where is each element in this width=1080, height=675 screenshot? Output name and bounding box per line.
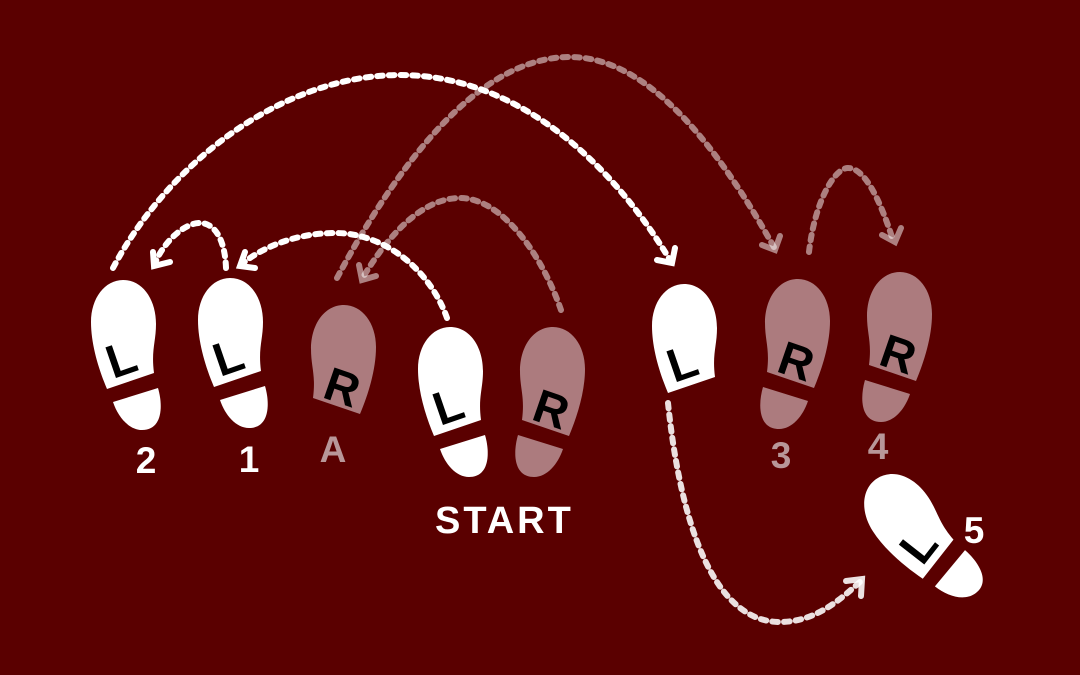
footprint: right foot A without heel: R	[318, 356, 367, 418]
label: START: START	[435, 500, 574, 542]
label: 1: 1	[239, 439, 259, 480]
footprint: left foot 1: L	[206, 327, 250, 386]
arrow: translucent arc from 3 to 4	[809, 168, 901, 252]
arrow: curved path from front left foot to 5	[668, 403, 862, 622]
label: 5: 5	[964, 510, 984, 551]
footprint: start right foot: R	[527, 378, 576, 440]
arrow: start left foot to 1	[240, 233, 447, 318]
label: 2: 2	[136, 440, 156, 481]
footprint: right foot 4	[862, 272, 932, 422]
footprint: front left foot without heel: L	[660, 333, 704, 392]
footprint: left foot 2	[91, 280, 161, 430]
footprint: right foot 3	[760, 279, 830, 429]
label: 3: 3	[771, 435, 791, 476]
footprint: start left foot: L	[426, 376, 470, 435]
footprint: left foot 5 rotated	[850, 458, 990, 622]
footprint: front left foot without heel	[652, 284, 717, 393]
arrow: small arc from 1 to 2	[153, 223, 226, 268]
footprint: left foot 5 rotated: L	[888, 518, 948, 573]
footprint: right foot 3: R	[772, 330, 821, 392]
footprint: right foot 4: R	[874, 323, 923, 385]
footprint: start left foot	[418, 327, 488, 477]
footprint: left foot 1	[198, 278, 268, 428]
footprint: left foot 2: L	[99, 329, 143, 388]
arrow: large translucent arc from A to 3	[337, 57, 780, 278]
arrow: translucent arc from start right foot to A	[359, 198, 561, 310]
footprint: right foot A without heel	[311, 305, 376, 418]
footprint: start right foot	[515, 327, 585, 477]
label: A: A	[320, 429, 346, 470]
label: 4: 4	[868, 426, 889, 467]
arrow: big arc from left foot 2 to front left foot	[113, 75, 675, 268]
